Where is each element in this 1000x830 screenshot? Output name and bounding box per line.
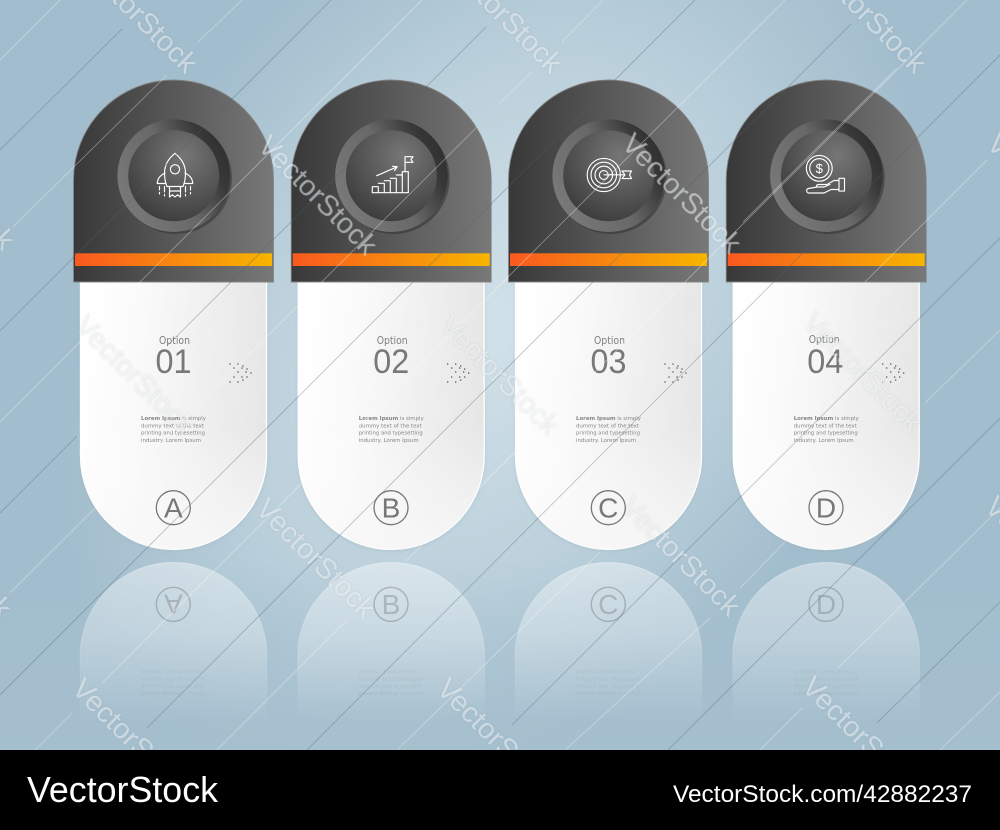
white card xyxy=(80,282,266,551)
watermarks: VectorStock xyxy=(614,491,747,623)
text block xyxy=(359,416,425,444)
label: Option 02: 02 xyxy=(373,343,409,381)
head xyxy=(726,80,926,282)
text block: dummy text of the text xyxy=(359,423,422,429)
icon: hand holding dollar coin xyxy=(806,155,844,193)
text block xyxy=(576,416,642,444)
reflection: option B: B xyxy=(382,589,400,620)
reflection: option C: dummy text of the text xyxy=(576,683,639,689)
head xyxy=(74,80,274,282)
letter badge D xyxy=(809,491,843,525)
watermarks: VectorStock xyxy=(251,130,384,262)
reflection: option A: A xyxy=(164,588,183,620)
label: Option 01: Option xyxy=(159,335,190,347)
text block: Lorem Ipsum is simply xyxy=(576,416,642,422)
arrow: dotted chevrons xyxy=(447,363,469,383)
text block: industry. Lorem Ipsum xyxy=(359,438,419,444)
footer image id: VectorStock.com/42882237 xyxy=(673,781,972,808)
reflection: option C: Lorem Ipsum is simply xyxy=(576,690,642,696)
reflection: option D: printing and typesetting xyxy=(794,675,858,681)
icon: growth chart with flag xyxy=(372,157,413,193)
text block: printing and typesetting xyxy=(576,431,640,437)
reflection: option A xyxy=(80,562,267,720)
letter badge A: A xyxy=(164,492,183,524)
reflection: option B: Lorem Ipsum is simply xyxy=(359,690,425,696)
watermarks: VectorStock xyxy=(249,493,382,625)
panel: option 02 xyxy=(291,80,491,720)
reflection: option D: Lorem Ipsum is simply xyxy=(794,690,860,696)
letter badge D: D xyxy=(816,492,836,524)
reflection: option A: dummy text of the text xyxy=(141,683,204,689)
arrow: dotted chevrons xyxy=(882,363,904,383)
reflection: option D xyxy=(733,562,920,720)
label: Option 04: Option xyxy=(809,334,840,346)
panel: option 03 xyxy=(508,80,708,720)
reflection: option B xyxy=(298,562,485,720)
icon: hand holding dollar coin: $ xyxy=(816,161,824,176)
letter badge C xyxy=(591,491,625,525)
text block: printing and typesetting xyxy=(141,431,205,437)
reflection: option D: dummy text of the text xyxy=(794,683,857,689)
reflection: option D: D xyxy=(816,589,836,620)
text block xyxy=(141,416,207,444)
reflection: option A: printing and typesetting xyxy=(141,675,205,681)
letter badge B: B xyxy=(382,492,400,524)
arrow: dotted chevrons xyxy=(229,363,252,383)
panel: option 04 xyxy=(726,80,926,720)
watermarks: VectorStock xyxy=(65,673,198,805)
letter badge A xyxy=(156,491,190,525)
arrow: dotted chevrons xyxy=(664,363,687,383)
reflection: option C: C xyxy=(598,589,618,620)
text block: dummy text of the text xyxy=(141,423,204,429)
text block: printing and typesetting xyxy=(359,431,423,437)
reflection: option A: industry. Lorem Ipsum xyxy=(141,668,201,674)
reflection: option C: industry. Lorem Ipsum xyxy=(576,668,636,674)
head xyxy=(508,80,708,282)
label: Option 03: 03 xyxy=(590,343,626,381)
label: Option 04: 04 xyxy=(807,343,843,381)
text block: Lorem Ipsum is simply xyxy=(141,416,207,422)
watermarks: VectorStock xyxy=(615,128,748,260)
letter badge C: C xyxy=(598,492,618,524)
watermarks: VectorStock xyxy=(796,307,929,439)
reflection: option B: dummy text of the text xyxy=(359,683,422,689)
footer brand: VectorStock xyxy=(27,769,219,810)
reflection: option C xyxy=(515,562,702,720)
text block: Lorem Ipsum is simply xyxy=(359,416,425,422)
text block xyxy=(794,416,860,444)
text block: printing and typesetting xyxy=(794,431,858,437)
label: Option 03: Option xyxy=(594,335,625,347)
watermarks: VectorStock xyxy=(430,673,563,805)
text block: industry. Lorem Ipsum xyxy=(141,438,201,444)
white card xyxy=(298,282,484,551)
footer bar xyxy=(0,750,1000,830)
head xyxy=(291,80,491,282)
panel: option 01 xyxy=(74,80,274,720)
reflection: option C: printing and typesetting xyxy=(576,675,640,681)
text block: industry. Lorem Ipsum xyxy=(794,438,854,444)
label: Option 02: Option xyxy=(377,335,408,347)
reflection: option A: Lorem Ipsum is simply xyxy=(141,690,207,696)
letter badge B xyxy=(374,491,408,525)
icon: rocket xyxy=(157,153,193,197)
reflection: option B: printing and typesetting xyxy=(359,675,423,681)
white card xyxy=(733,282,919,551)
watermarks: VectorStock xyxy=(433,310,566,442)
white card xyxy=(516,282,702,551)
text block: Lorem Ipsum is simply xyxy=(794,416,860,422)
text block: dummy text of the text xyxy=(576,423,639,429)
icon: target with dart xyxy=(587,158,632,192)
reflection: option B: industry. Lorem Ipsum xyxy=(359,668,419,674)
text block: industry. Lorem Ipsum xyxy=(576,438,636,444)
text block: dummy text of the text xyxy=(794,423,857,429)
watermarks: VectorStock xyxy=(795,671,928,803)
reflection: option D: industry. Lorem Ipsum xyxy=(794,668,854,674)
watermarks: VectorStock xyxy=(68,310,201,442)
label: Option 01: 01 xyxy=(156,343,192,381)
